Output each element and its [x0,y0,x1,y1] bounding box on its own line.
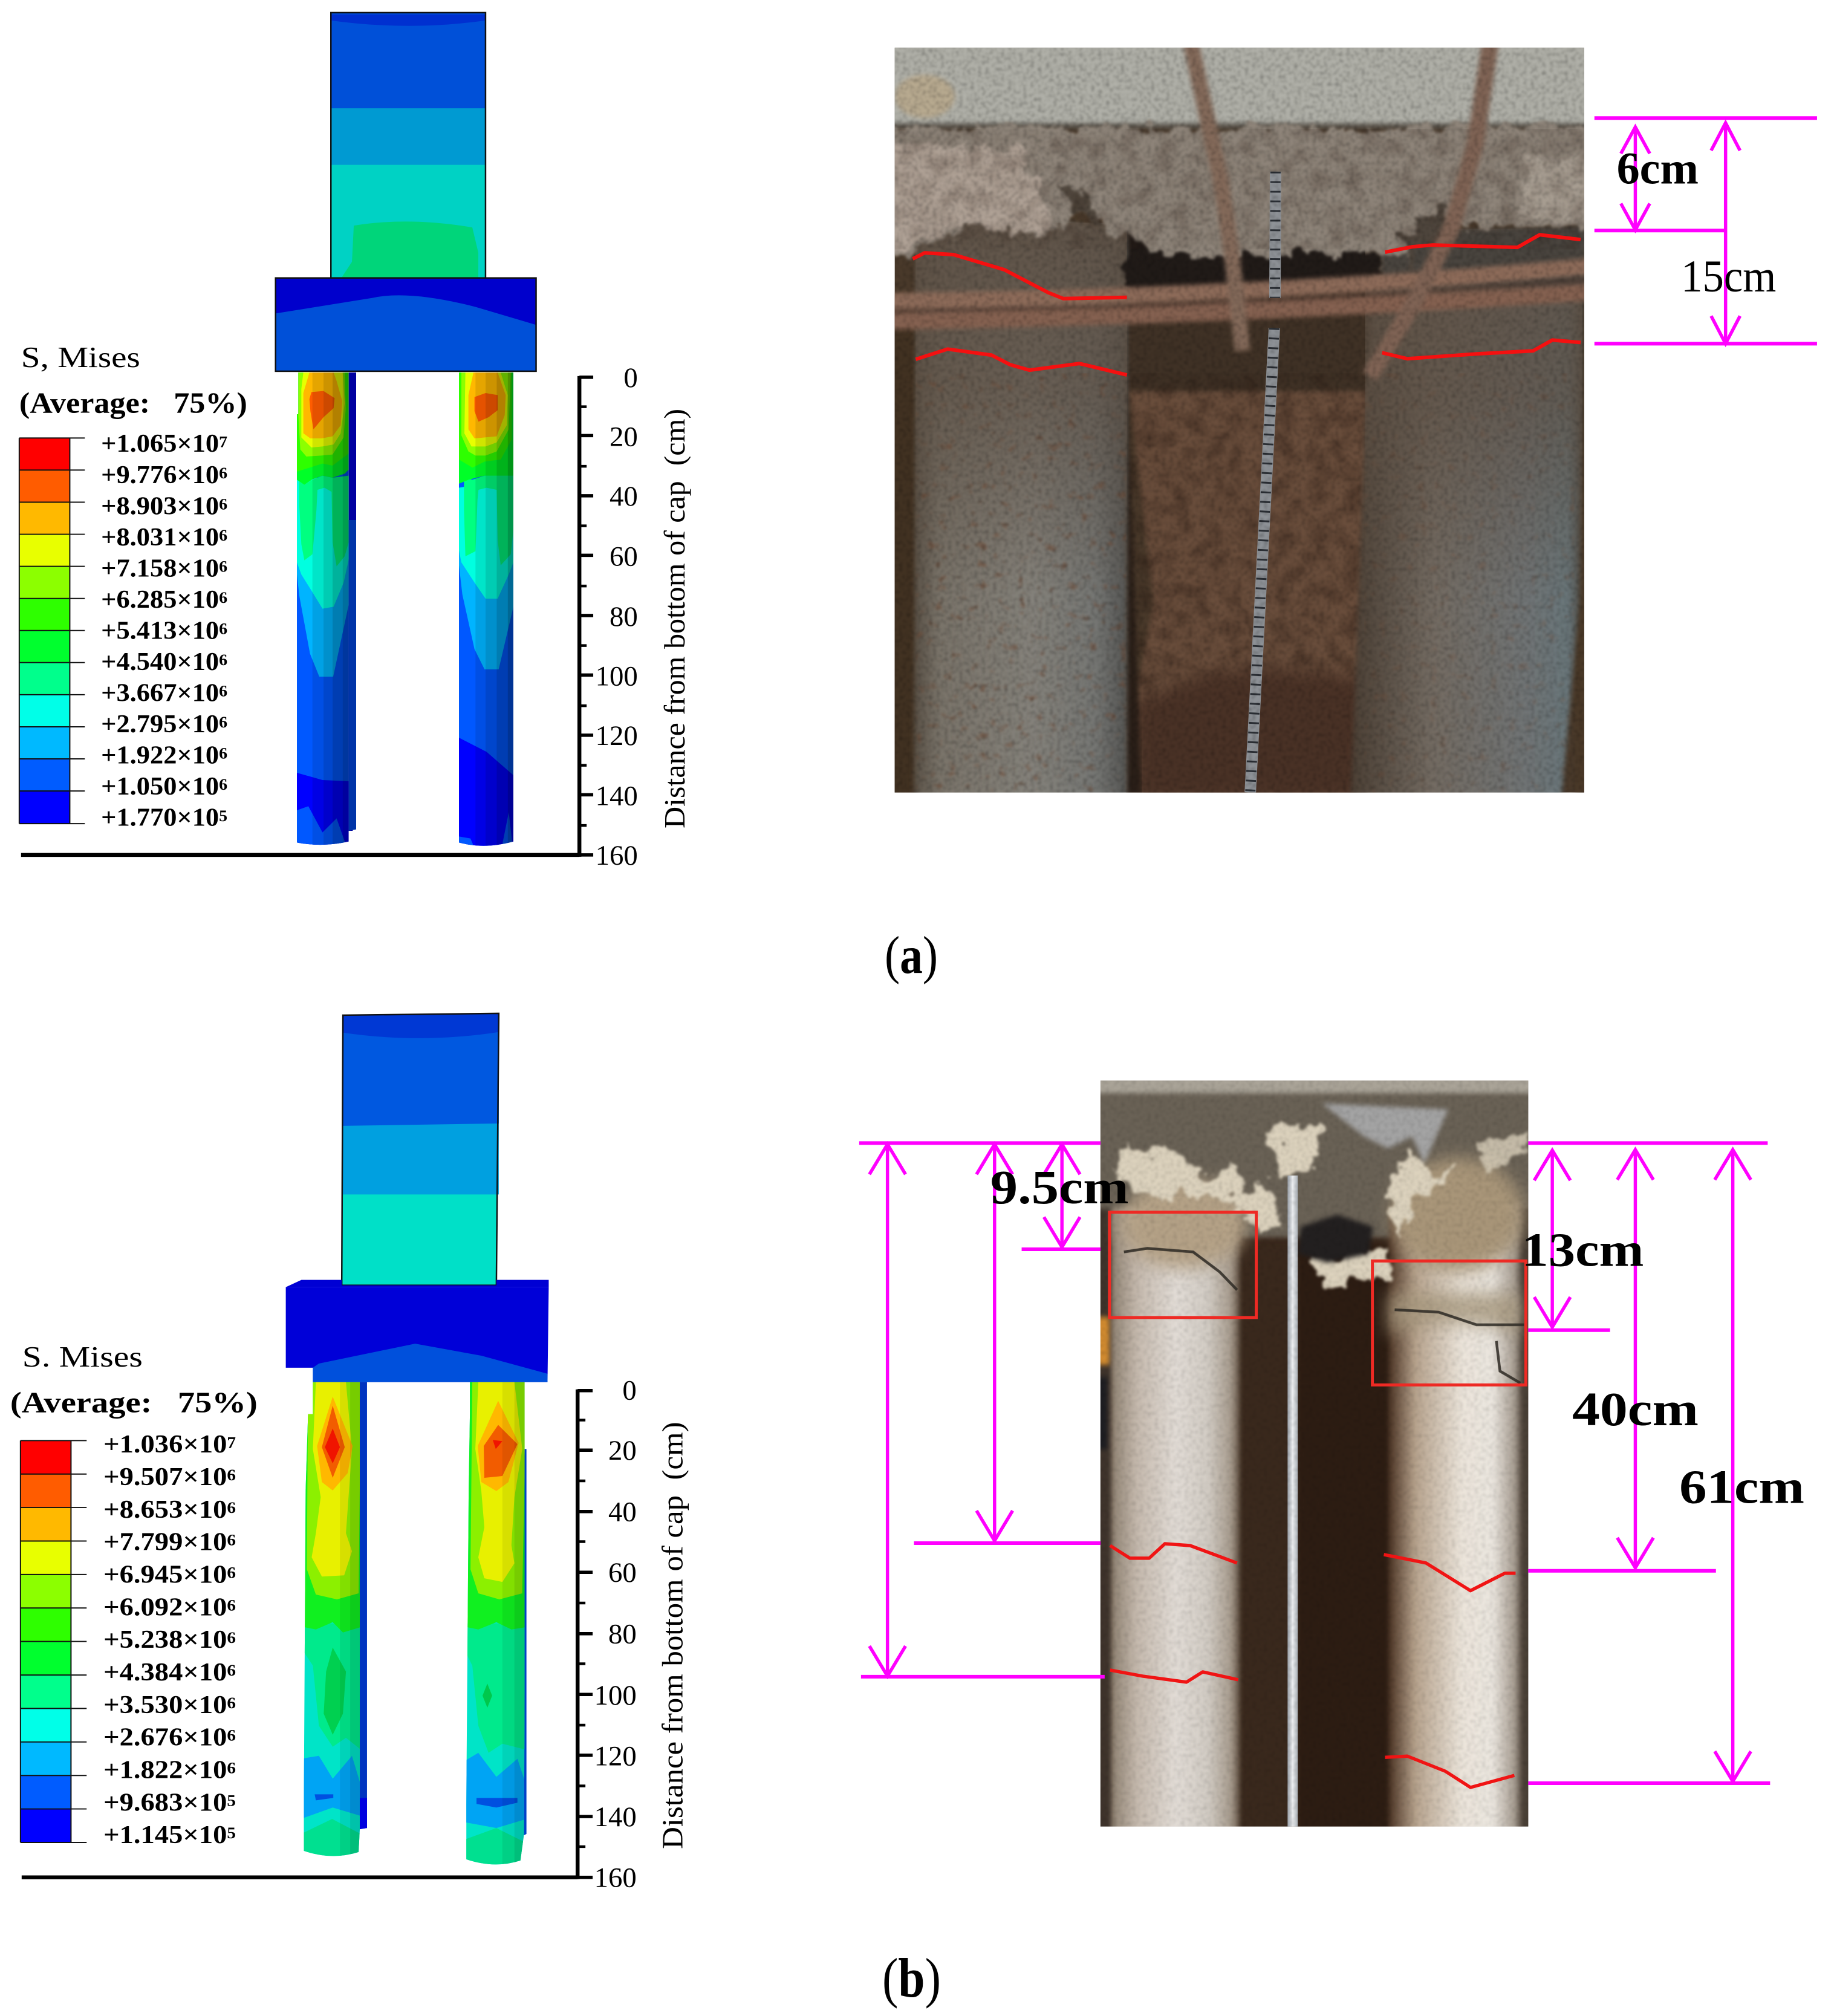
legend values b: 6 [227,1564,236,1582]
colour legend a [19,438,85,824]
lower dark trench a [1136,668,1367,801]
FE pile cap a [276,278,536,371]
broken concrete edge a [877,126,1605,289]
specks on piles a [915,373,1127,793]
depth axis b: 140 [594,1801,637,1833]
legend values b: 6 [227,1726,236,1744]
depth axis a: 60 [610,541,638,572]
depth axis a: 20 [610,421,638,452]
depth axis b: 100 [594,1680,637,1711]
legend values a: 7 [219,432,227,450]
legend values b: +6.945×10 [103,1561,217,1589]
legend values b: 6 [227,1498,236,1517]
FE left pile b [301,1382,367,1864]
legend values b: 6 [227,1759,236,1777]
legend values b: +9.507×10 [103,1463,217,1491]
legend values a: +5.413×10 [101,616,215,645]
legend values b: 6 [227,1628,236,1647]
FE pile cap b [286,1280,548,1382]
FE right pile b [463,1382,527,1873]
legend values b: +1.145×10 [103,1821,217,1849]
depth axis a: 120 [596,720,638,752]
depth axis b: 80 [608,1619,637,1650]
legend values b: 6 [227,1596,236,1614]
legend values b: +9.683×10 [103,1788,217,1816]
legend values a: 6 [219,588,227,606]
panel: FE model a [19,13,691,871]
legend values a: 6 [219,775,227,793]
pile head discolouration b [1120,1157,1524,1335]
legend values a: 6 [219,557,227,575]
legend values b: 7 [227,1433,236,1451]
depth axis a: 40 [610,481,638,512]
legend values b: +1.822×10 [103,1756,217,1784]
legend values a: +2.795×10 [101,710,215,738]
legend values b: +3.530×10 [103,1691,217,1719]
legend values a: 6 [219,495,227,513]
legend values a [101,429,227,832]
depth axis b: 40 [608,1497,637,1528]
legend values a: 6 [219,713,227,731]
depth axis b: 0 [622,1375,637,1406]
legend values a: +1.050×10 [101,772,215,801]
legend title a: (Average: 75%) [19,387,247,420]
dimension lines a [1595,118,1817,343]
dimension label 6cm: 6cm [1617,144,1699,194]
legend values a: +6.285×10 [101,585,215,614]
legend values a: 6 [219,620,227,638]
panel: site photo b [859,1076,1804,1841]
red inspection boxes b [1110,1212,1526,1385]
FE column a [331,13,486,278]
legend values a: 6 [219,651,227,669]
FE right pile a [458,369,514,853]
depth axis b: 60 [608,1557,637,1588]
legend values a: +9.776×10 [101,461,215,489]
legend values a: +8.903×10 [101,492,215,520]
depth axis title b: Distance from bottom of cap (cm) [656,1422,689,1849]
legend title b: (Average: 75%) [10,1387,258,1419]
legend title a: S, Mises [21,341,140,374]
legend title a [19,341,247,420]
legend values a: 6 [219,464,227,482]
depth axis a: 80 [610,601,638,632]
panel: site photo a [877,42,1817,801]
grey stain and dark void b [1298,1104,1448,1263]
legend values b: +1.036×10 [103,1430,217,1458]
legend values b: 5 [227,1791,236,1809]
cracks in photo b [1124,1248,1524,1383]
dimension label 61cm: 61cm [1679,1460,1804,1514]
panel: FE model b [10,1013,689,1894]
legend values a: 5 [219,807,227,825]
depth axis a: 140 [596,780,638,811]
tape in photo b [1287,1175,1298,1829]
measuring tape [1250,172,1275,793]
chipped concrete b [1117,1125,1528,1287]
FE column b [342,1013,499,1286]
photo a illustration [877,42,1605,801]
legend values b: 6 [227,1466,236,1484]
legend title b [10,1341,258,1419]
depth axis b: 160 [594,1862,637,1894]
legend values b: +4.384×10 [103,1658,217,1686]
caption b: (b) [882,1947,941,2009]
depth axis b: 120 [594,1741,637,1772]
depth axis a [21,362,638,871]
depth axis title a: Distance from bottom of cap (cm) [658,409,691,828]
legend values a: 6 [219,526,227,544]
legend values a: 6 [219,682,227,700]
legend values a: +1.922×10 [101,741,215,770]
legend values a: +1.770×10 [101,804,215,832]
legend values a: +4.540×10 [101,648,215,676]
legend values b: 6 [227,1661,236,1679]
legend values b: +7.799×10 [103,1528,217,1556]
legend values b: +5.238×10 [103,1625,217,1654]
colour legend b [21,1440,86,1842]
rebars [889,42,1593,376]
concrete texture a [895,129,1584,249]
photo b illustration [1093,1076,1538,1841]
FE left pile a [296,369,356,853]
legend values b: 6 [227,1531,236,1549]
legend values b: +2.676×10 [103,1723,217,1752]
dimension label 13cm: 13cm [1521,1223,1644,1276]
legend values b: +6.092×10 [103,1593,217,1621]
dimension label 15cm: 15cm [1681,252,1776,302]
depth axis b [22,1375,637,1894]
dimension label 9.5cm: 9.5cm [990,1161,1129,1214]
depth axis a: 100 [596,660,638,692]
legend title b: S. Mises [22,1341,143,1373]
legend values a: +1.065×10 [101,429,215,458]
depth axis a: 160 [596,840,638,871]
legend values b: +8.653×10 [103,1495,217,1524]
legend values a: +8.031×10 [101,523,215,551]
legend values b: 6 [227,1694,236,1712]
red crack lines b [1110,1544,1515,1787]
legend values a: 6 [219,744,227,763]
legend values a: +3.667×10 [101,679,215,707]
legend values a: +7.158×10 [101,554,215,582]
dimension lines b [859,1143,1770,1783]
legend values b [103,1430,236,1849]
pile head staining a [920,223,1127,553]
caption a: (a) [885,926,938,985]
depth axis a: 0 [623,362,638,394]
soil texture a [1127,373,1368,795]
red crack lines a [912,235,1581,375]
depth axis b: 20 [608,1435,637,1466]
legend values b: 5 [227,1824,236,1842]
dimension label 40cm: 40cm [1572,1383,1699,1436]
